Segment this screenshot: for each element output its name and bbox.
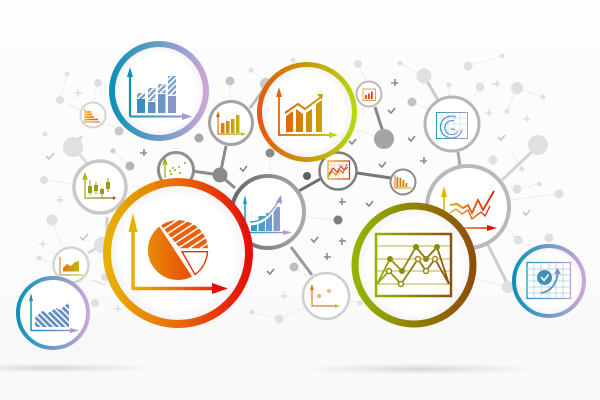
plus and check marks [39,79,530,312]
ring: rising bars and arrow [260,64,354,160]
small circle: horizontal bars [80,102,106,128]
pale dotted connectors [39,56,559,319]
dark series [377,244,449,284]
ring: pie chart [107,182,249,324]
pale gray nodes [36,54,564,324]
small circle: framed bar chart [356,82,382,106]
frame [376,234,451,296]
axes [128,213,228,294]
dark gray nodes [110,76,416,272]
small circle: dots chart [158,152,194,188]
small circle: framed line chart [320,152,356,190]
ring: framed line chart [355,206,473,324]
ring: stacked bar chart [112,44,206,138]
solid gray connectors [73,76,536,285]
ring: grid chart with check mark [514,246,584,316]
pie wedge hatched [161,220,208,248]
ring: right gray with zigzag lines [427,166,509,248]
pie wedge outline [182,252,208,274]
ring: radial grid chart [425,97,479,151]
ring: hatched area chart [18,278,88,348]
small circle: scatter chart [303,273,349,319]
grid lines [377,246,450,284]
small circle: area chart [54,248,88,282]
axes [127,67,192,120]
ring: center gray with growth chart [232,176,304,248]
small circle: descending bars [390,170,416,194]
stacked bars [137,76,176,113]
pie wedge solid [148,226,192,280]
network connectors and nodes [36,54,564,324]
floor shadows [0,363,545,375]
small circle: bar chart [210,102,252,144]
small circle: candlestick chart [74,161,126,213]
light series [377,256,449,286]
